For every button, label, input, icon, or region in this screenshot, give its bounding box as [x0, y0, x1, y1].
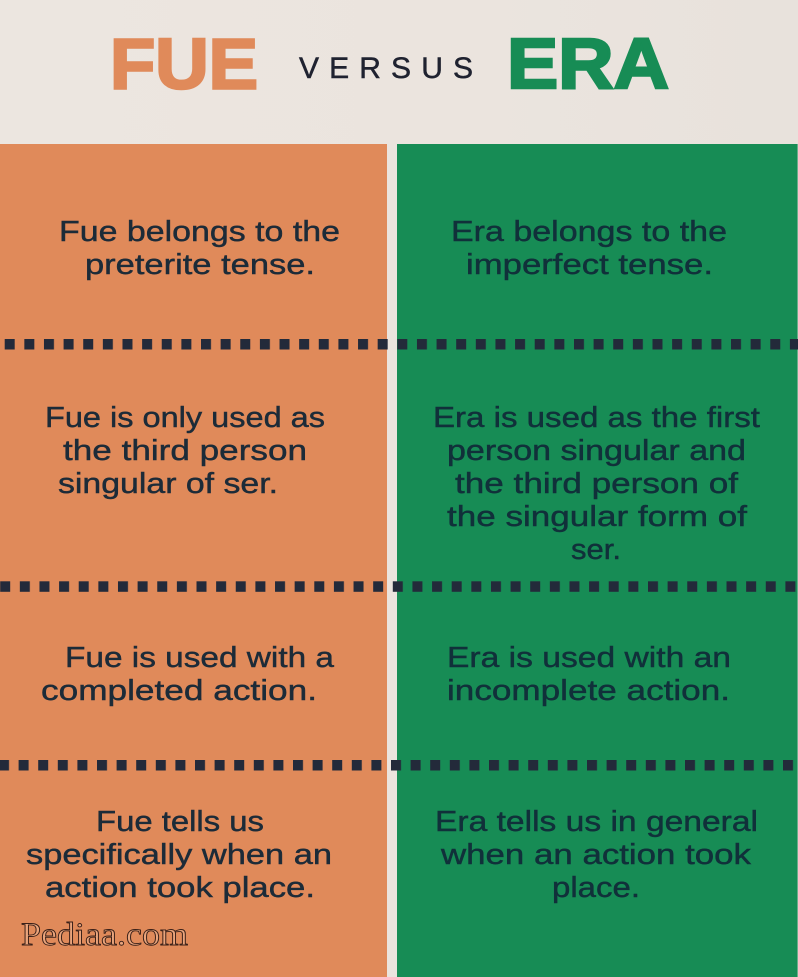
row 3 text: fue: Fue is used with a	[65, 642, 335, 674]
row 4 text: era: place.	[552, 872, 640, 904]
row 3 text: era: Era is used with an	[447, 642, 731, 674]
title	[110, 25, 669, 104]
row 4 text: fue: action took place.	[45, 872, 315, 904]
row 3 text: era: incomplete action.	[447, 675, 730, 707]
row 1 text: fue: Fue belongs to the	[59, 216, 340, 248]
row 2 text: era: the singular form of	[447, 501, 748, 533]
row 2 text: fue: singular of ser.	[58, 468, 278, 500]
divider 3	[0, 760, 798, 770]
watermark: Pediaa.com: Pediaa.com	[21, 917, 188, 953]
row 2 text: era: person singular and	[447, 435, 746, 467]
row 4 text: fue: Fue tells us	[96, 806, 264, 838]
panel: era column	[397, 144, 798, 977]
row 1 text: fue: preterite tense.	[85, 249, 315, 281]
row 2 text: fue: Fue is only used as	[45, 402, 325, 434]
row 2 text: era	[433, 402, 760, 566]
row 3 text: fue: completed action.	[41, 675, 317, 707]
row 1 text: era	[451, 216, 727, 281]
row 2 text: fue: the third person	[63, 435, 307, 467]
row 3 text: era	[447, 642, 731, 707]
row 4 text: era: Era tells us in general	[435, 806, 758, 838]
row 4 text: era: when an action took	[440, 839, 752, 871]
row 1 text: era: Era belongs to the	[451, 216, 727, 248]
panel: fue column	[0, 144, 387, 977]
heading: FUE: FUE	[110, 26, 258, 104]
row 4 text: era	[435, 806, 758, 904]
row 3 text: fue	[41, 642, 335, 707]
row 2 text: era: ser.	[571, 534, 621, 566]
row 4 text: fue: specifically when an	[26, 839, 332, 871]
row 2 text: era: Era is used as the first	[433, 402, 760, 434]
divider 1	[0, 339, 798, 350]
heading: ERA: ERA	[507, 25, 669, 104]
divider 2	[0, 581, 798, 592]
row 2 text: fue	[45, 402, 325, 500]
row 1 text: era: imperfect tense.	[466, 249, 713, 281]
row 2 text: era: the third person of	[455, 468, 739, 500]
heading: versus: VERSUS	[299, 52, 473, 85]
row 4 text: fue	[26, 806, 332, 904]
row 1 text: fue	[59, 216, 340, 281]
